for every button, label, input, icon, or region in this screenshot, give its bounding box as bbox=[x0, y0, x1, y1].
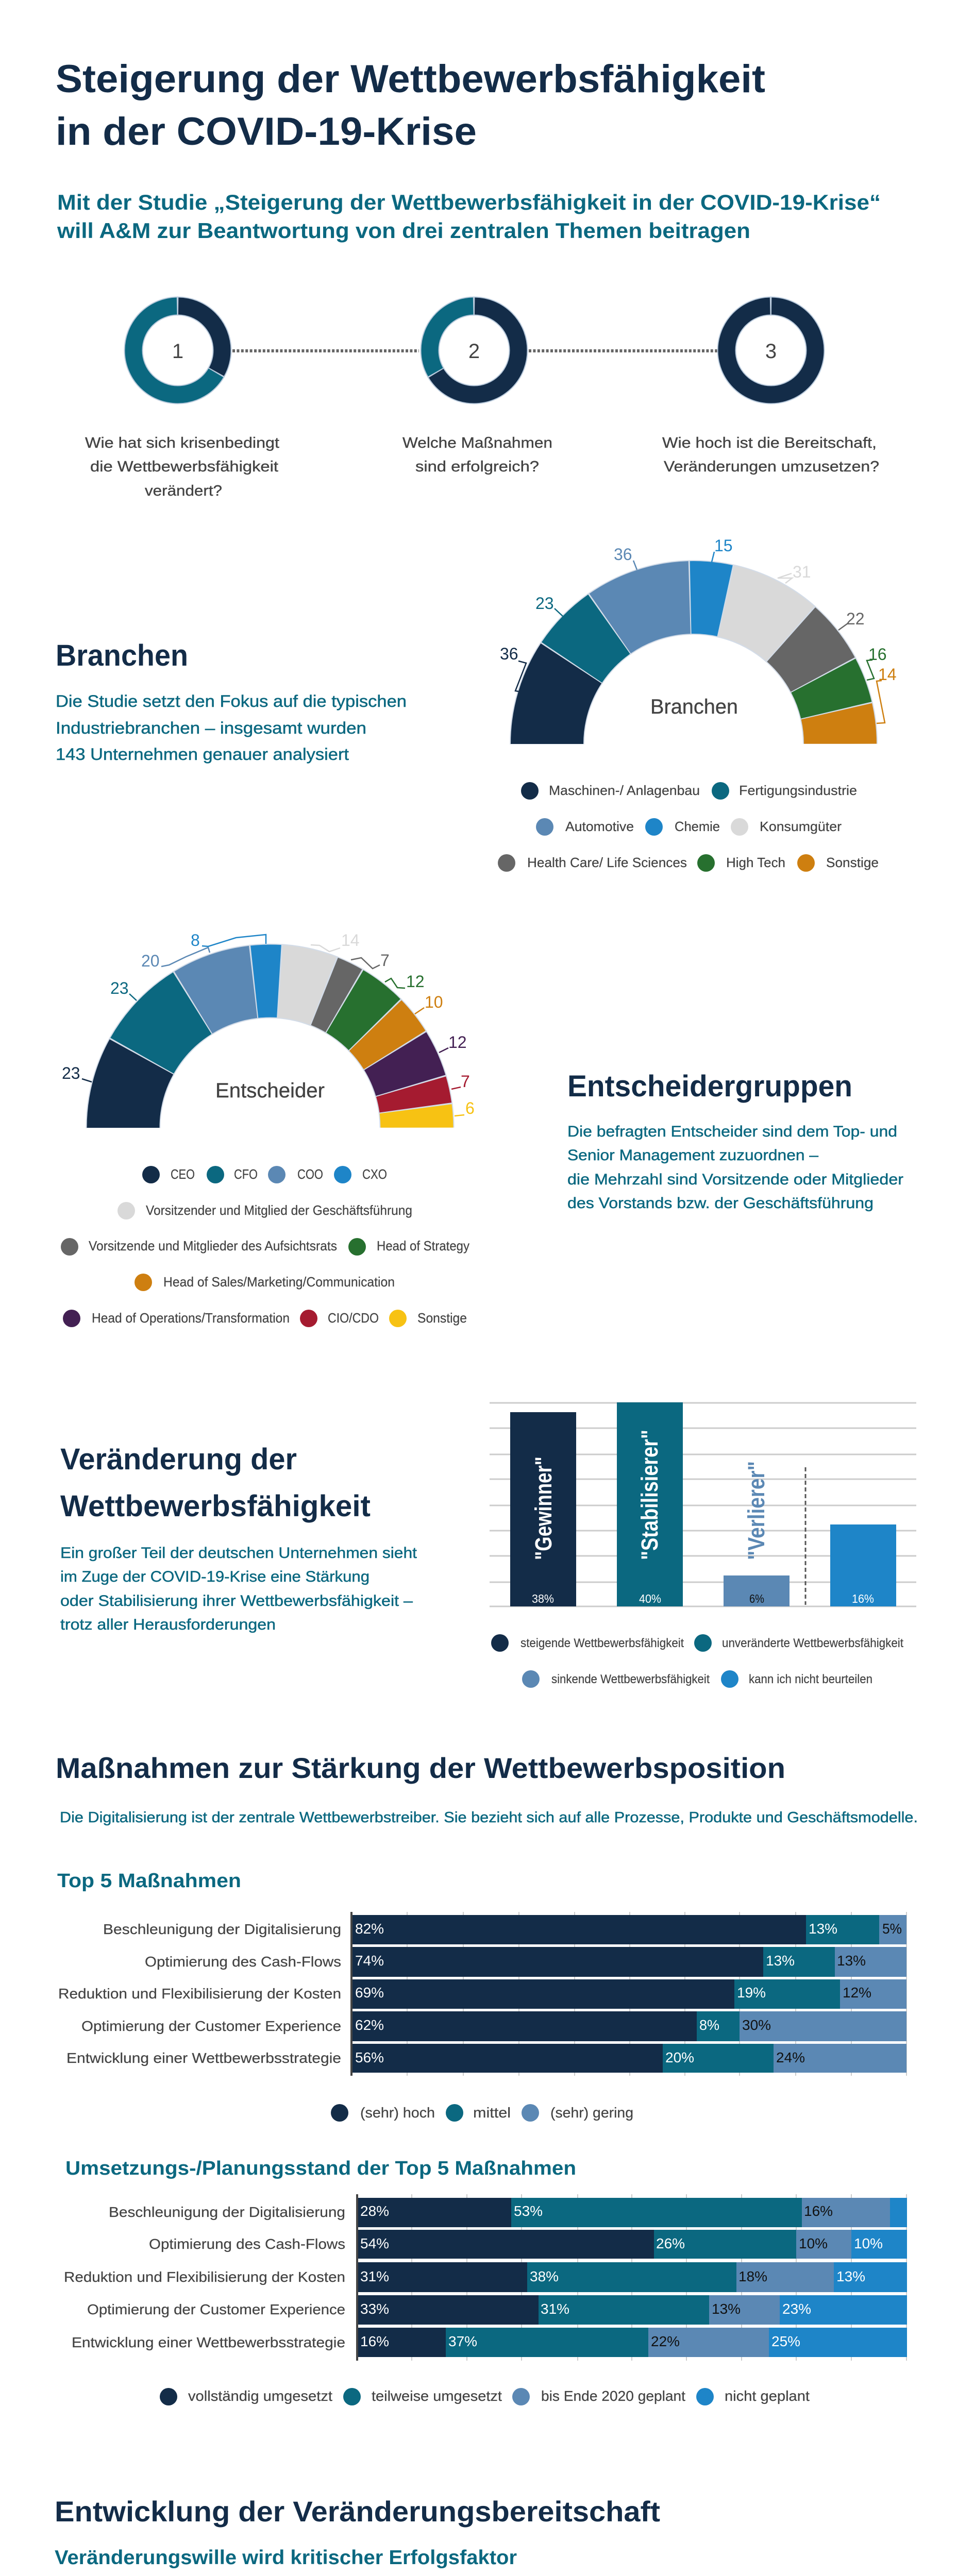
legend: Branchen: Maschinen-/ Anlagenbau bbox=[549, 783, 700, 798]
stacked bar chart: Top 5 Maßnahmen: 13% bbox=[837, 1953, 866, 1969]
legend: Branchen: High Tech bbox=[726, 855, 785, 870]
stacked bar chart: Top 5 Maßnahmen: 62% bbox=[355, 2017, 384, 2033]
legend: Entscheider: Head of Operations/Transformation bbox=[92, 1310, 290, 1326]
legend: Entscheider: Vorsitzende und Mitglieder des Aufsichtsrats bbox=[89, 1238, 337, 1253]
ring 1: 1 bbox=[172, 340, 183, 363]
stacked bar chart: Umsetzungsstand: 28% bbox=[360, 2203, 389, 2219]
text: Veränderung description: trotz aller Herausforderungen bbox=[60, 1616, 276, 1633]
half donut chart: Branchen: 14 bbox=[878, 665, 897, 684]
half donut chart: Entscheider: 8 bbox=[191, 931, 200, 950]
stacked bar chart: Umsetzungsstand: 13% bbox=[712, 2301, 741, 2317]
half donut chart: Branchen: 36 bbox=[500, 645, 518, 663]
legend: Umsetzungsstand: nicht geplant bbox=[725, 2388, 810, 2404]
title: in der COVID-19-Krise bbox=[56, 110, 477, 154]
stacked bar chart: Umsetzungsstand: 25% bbox=[771, 2333, 800, 2349]
heading: Umsetzungsstand: Umsetzungs-/Planungsstand der Top 5 Maßnahmen bbox=[65, 2158, 576, 2179]
legend: Wettbewerbsfähigkeit: unveränderte Wettbewerbsfähigkeit bbox=[722, 1636, 903, 1650]
subtitle: Mit der Studie „Steigerung der Wettbewerbsfähigkeit in der COVID-19-Krise“ bbox=[57, 190, 881, 214]
stacked bar chart: Umsetzungsstand: 10% bbox=[854, 2235, 883, 2251]
legend: Top 5 Maßnahmen: mittel bbox=[473, 2105, 511, 2121]
legend: Top 5 Maßnahmen: (sehr) hoch bbox=[360, 2105, 435, 2121]
stacked bar chart: Umsetzungsstand: 31% bbox=[541, 2301, 569, 2317]
bar chart: Wettbewerbsfähigkeit bbox=[490, 1402, 916, 1606]
legend: Wettbewerbsfähigkeit: steigende Wettbewerbsfähigkeit bbox=[520, 1636, 684, 1650]
heading: Maßnahmen: Maßnahmen zur Stärkung der Wettbewerbsposition bbox=[56, 1752, 785, 1784]
bar chart: Wettbewerbsfähigkeit: 38% bbox=[532, 1592, 554, 1605]
heading: Veränderung: Wettbewerbsfähigkeit bbox=[60, 1489, 371, 1523]
text: Branchen description: Industriebranchen – insgesamt wurden bbox=[56, 719, 366, 737]
legend: Branchen: Automotive bbox=[565, 819, 634, 834]
stacked bar chart: Top 5 Maßnahmen: 8% bbox=[699, 2017, 719, 2033]
stacked bar chart: Umsetzungsstand bbox=[64, 2194, 907, 2361]
legend: Top 5 Maßnahmen bbox=[331, 2104, 633, 2122]
question 2: sind erfolgreich? bbox=[415, 459, 539, 475]
half donut chart: Entscheider: 23 bbox=[62, 1064, 80, 1082]
legend: Entscheider: Head of Sales/Marketing/Communication bbox=[163, 1274, 395, 1290]
half donut chart: Entscheider: Entscheider bbox=[215, 1079, 325, 1102]
heading: Veränderung: Veränderung der bbox=[60, 1443, 297, 1476]
stacked bar chart: Top 5 Maßnahmen: 30% bbox=[742, 2017, 771, 2033]
legend: Entscheider: Vorsitzender und Mitglied der Geschäftsführung bbox=[146, 1202, 412, 1218]
stacked bar chart: Umsetzungsstand: 53% bbox=[514, 2203, 543, 2219]
subtitle bbox=[57, 190, 881, 243]
half donut chart: Entscheider: 23 bbox=[110, 979, 129, 997]
half donut chart: Entscheider: 6 bbox=[465, 1099, 475, 1117]
half donut chart: Entscheider: 12 bbox=[448, 1033, 467, 1052]
legend: Branchen: Konsumgüter bbox=[760, 819, 842, 834]
heading: Entscheidergruppen: Entscheidergruppen bbox=[567, 1070, 852, 1103]
text: Entscheidergruppen description: des Vorstands bzw. der Geschäftsführung bbox=[567, 1195, 874, 1212]
text: Branchen description: 143 Unternehmen genauer analysiert bbox=[56, 745, 349, 764]
text: Branchen description: Die Studie setzt den Fokus auf die typischen bbox=[56, 692, 407, 710]
legend: Branchen: Health Care/ Life Sciences bbox=[527, 855, 687, 870]
bar chart: Wettbewerbsfähigkeit: 40% bbox=[639, 1592, 661, 1605]
question 1: die Wettbewerbsfähigkeit bbox=[90, 459, 278, 475]
legend: Wettbewerbsfähigkeit: sinkende Wettbewerbsfähigkeit bbox=[551, 1672, 710, 1686]
legend: Wettbewerbsfähigkeit: kann ich nicht beurteilen bbox=[749, 1672, 872, 1686]
text: Entscheidergruppen description: die Mehrzahl sind Vorsitzende oder Mitglieder bbox=[567, 1171, 903, 1188]
stacked bar chart: Umsetzungsstand: 54% bbox=[360, 2235, 389, 2251]
half donut chart: Branchen: 31 bbox=[793, 563, 811, 581]
stacked bar chart: Umsetzungsstand: 26% bbox=[656, 2235, 685, 2251]
question 3: Wie hoch ist die Bereitschaft, bbox=[662, 435, 877, 451]
bar chart: Wettbewerbsfähigkeit: 16% bbox=[852, 1592, 874, 1605]
stacked bar chart: Umsetzungsstand: 38% bbox=[530, 2268, 559, 2284]
half donut chart: Branchen bbox=[500, 536, 897, 890]
stacked bar chart: Umsetzungsstand: 18% bbox=[738, 2268, 767, 2284]
text: Veränderung description: Ein großer Teil der deutschen Unternehmen sieht bbox=[60, 1545, 417, 1562]
legend: Umsetzungsstand: teilweise umgesetzt bbox=[372, 2388, 502, 2404]
heading: Top 5 Maßnahmen: Top 5 Maßnahmen bbox=[57, 1870, 241, 1892]
stacked bar chart: Top 5 Maßnahmen: 20% bbox=[665, 2049, 694, 2065]
text: Branchen description bbox=[56, 692, 407, 764]
stacked bar chart: Umsetzungsstand: Beschleunigung der Digitalisierung bbox=[109, 2204, 345, 2220]
stacked bar chart: Umsetzungsstand: 33% bbox=[360, 2301, 389, 2317]
title bbox=[56, 57, 765, 154]
panel: Entscheidergruppen text bbox=[567, 1070, 903, 1212]
stacked bar chart: Top 5 Maßnahmen: 12% bbox=[843, 1985, 871, 2001]
question 1: Wie hat sich krisenbedingt bbox=[85, 435, 279, 451]
panel: Branchen text bbox=[56, 639, 407, 764]
stacked bar chart: Umsetzungsstand: Optimierung des Cash-Flows bbox=[149, 2236, 345, 2252]
stacked bar chart: Top 5 Maßnahmen bbox=[58, 1912, 906, 2076]
stacked bar chart: Top 5 Maßnahmen: Beschleunigung der Digitalisierung bbox=[103, 1921, 341, 1937]
legend: Entscheider: CXO bbox=[362, 1166, 387, 1182]
legend: Umsetzungsstand bbox=[160, 2388, 810, 2405]
text: Veränderung description bbox=[60, 1545, 417, 1633]
legend: Entscheider: Sonstige bbox=[417, 1310, 467, 1326]
stacked bar chart: Umsetzungsstand: 10% bbox=[799, 2235, 828, 2251]
stacked bar chart: Top 5 Maßnahmen: 24% bbox=[776, 2049, 805, 2065]
ring 1 bbox=[133, 306, 222, 395]
stacked bar chart: Top 5 Maßnahmen: Entwicklung einer Wettbewerbsstrategie bbox=[66, 2050, 341, 2066]
legend: Umsetzungsstand: bis Ende 2020 geplant bbox=[541, 2388, 685, 2404]
stacked bar chart: Umsetzungsstand: 23% bbox=[782, 2301, 811, 2317]
bar chart: Wettbewerbsfähigkeit: "Stabilisierer" bbox=[636, 1430, 663, 1560]
half donut chart: Entscheider: 7 bbox=[380, 951, 390, 970]
half donut chart: Branchen: 15 bbox=[714, 536, 733, 555]
stacked bar chart: Umsetzungsstand: Entwicklung einer Wettbewerbsstrategie bbox=[72, 2334, 345, 2350]
panel: three questions bbox=[85, 306, 879, 499]
question 2: Welche Maßnahmen bbox=[402, 435, 552, 451]
stacked bar chart: Top 5 Maßnahmen: 69% bbox=[355, 1985, 384, 2001]
heading: Entwicklung der Veränderungsbereitschaft: Entwicklung der Veränderungsbereitschaft bbox=[55, 2495, 660, 2528]
legend: Wettbewerbsfähigkeit bbox=[491, 1634, 903, 1688]
legend: Branchen: Chemie bbox=[675, 819, 720, 834]
half donut chart: Branchen: Branchen bbox=[650, 696, 738, 718]
question 2 bbox=[402, 435, 552, 475]
stacked bar chart: Top 5 Maßnahmen: 74% bbox=[355, 1953, 384, 1969]
question 3: Veränderungen umzusetzen? bbox=[664, 459, 879, 475]
stacked bar chart: Top 5 Maßnahmen: 5% bbox=[882, 1921, 902, 1937]
text: Veränderung description: oder Stabilisierung ihrer Wettbewerbsfähigkeit – bbox=[60, 1592, 413, 1609]
bar chart: Wettbewerbsfähigkeit: "Gewinner" bbox=[530, 1456, 557, 1560]
legend: Branchen: Sonstige bbox=[826, 855, 879, 870]
bar chart: Wettbewerbsfähigkeit: 6% bbox=[749, 1592, 764, 1605]
text: Veränderung description: im Zuge der COVID-19-Krise eine Stärkung bbox=[60, 1568, 370, 1585]
half donut chart: Entscheider bbox=[62, 931, 475, 1275]
heading: Branchen: Branchen bbox=[56, 639, 188, 672]
stacked bar chart: Top 5 Maßnahmen: 13% bbox=[766, 1953, 795, 1969]
half donut chart: Entscheider: 20 bbox=[141, 952, 160, 970]
panel: Veränderung der Wettbewerbsfähigkeit text bbox=[60, 1443, 417, 1633]
legend: Umsetzungsstand: vollständig umgesetzt bbox=[188, 2388, 332, 2404]
title: Steigerung der Wettbewerbsfähigkeit bbox=[56, 57, 765, 101]
stacked bar chart: Top 5 Maßnahmen: 82% bbox=[355, 1921, 384, 1937]
ring 3 bbox=[727, 306, 815, 395]
stacked bar chart: Top 5 Maßnahmen: Optimierung des Cash-Flows bbox=[145, 1954, 341, 1970]
subtitle: will A&M zur Beantwortung von drei zentralen Themen beitragen bbox=[57, 218, 750, 243]
text: Digitalisierung: Die Digitalisierung ist der zentrale Wettbewerbstreiber. Sie bezieht sich auf alle Prozesse, Produkte und Geschäftsmodelle. bbox=[60, 1809, 918, 1826]
legend: Entscheider: COO bbox=[297, 1166, 323, 1182]
text: Entscheidergruppen description: Senior Management zuzuordnen – bbox=[567, 1147, 818, 1164]
half donut chart: Entscheider: 14 bbox=[341, 931, 360, 950]
legend: Entscheider: CEO bbox=[171, 1166, 195, 1182]
text: Entscheidergruppen description bbox=[567, 1123, 903, 1212]
legend: Entscheider: CIO/CDO bbox=[328, 1310, 379, 1326]
ring 2 bbox=[430, 306, 518, 395]
half donut chart: Branchen: 16 bbox=[868, 645, 887, 664]
stacked bar chart: Top 5 Maßnahmen: 56% bbox=[355, 2049, 384, 2065]
connector 2 bbox=[529, 349, 717, 352]
bar chart: Wettbewerbsfähigkeit: "Verlierer" bbox=[743, 1461, 769, 1560]
stacked bar chart: Umsetzungsstand: 31% bbox=[360, 2268, 389, 2284]
connector 1 bbox=[232, 349, 419, 352]
ring 2: 2 bbox=[468, 340, 480, 363]
legend: Top 5 Maßnahmen: (sehr) gering bbox=[550, 2105, 633, 2121]
half donut chart: Entscheider: 10 bbox=[425, 993, 443, 1011]
subheading: Veränderungswille: Veränderungswille wird kritischer Erfolgsfaktor bbox=[55, 2547, 517, 2569]
question 1 bbox=[85, 435, 279, 499]
half donut chart: Branchen: 22 bbox=[846, 609, 865, 628]
stacked bar chart: Umsetzungsstand: Reduktion und Flexibilisierung der Kosten bbox=[64, 2269, 345, 2285]
stacked bar chart: Top 5 Maßnahmen: Reduktion und Flexibilisierung der Kosten bbox=[58, 1986, 341, 2002]
stacked bar chart: Umsetzungsstand: 16% bbox=[360, 2333, 389, 2349]
ring 3: 3 bbox=[765, 340, 777, 363]
legend: Branchen bbox=[498, 782, 879, 872]
half donut chart: Branchen: 23 bbox=[535, 594, 554, 613]
stacked bar chart: Umsetzungsstand: 22% bbox=[651, 2333, 680, 2349]
legend: Branchen: Fertigungsindustrie bbox=[739, 783, 857, 798]
stacked bar chart: Top 5 Maßnahmen: 13% bbox=[809, 1921, 837, 1937]
legend: Entscheider: Head of Strategy bbox=[377, 1238, 469, 1253]
heading: Veränderung bbox=[60, 1443, 371, 1523]
legend: Entscheider: CFO bbox=[234, 1166, 258, 1182]
half donut chart: Entscheider: 7 bbox=[461, 1072, 470, 1091]
legend: Entscheider bbox=[61, 1166, 469, 1327]
stacked bar chart: Umsetzungsstand: 37% bbox=[448, 2333, 477, 2349]
stacked bar chart: Umsetzungsstand: 13% bbox=[836, 2268, 865, 2284]
stacked bar chart: Umsetzungsstand: 16% bbox=[804, 2203, 833, 2219]
stacked bar chart: Umsetzungsstand: Optimierung der Customer Experience bbox=[87, 2301, 345, 2317]
question 3 bbox=[662, 435, 879, 475]
half donut chart: Branchen: 36 bbox=[614, 545, 632, 564]
question 1: verändert? bbox=[145, 483, 222, 499]
stacked bar chart: Top 5 Maßnahmen: 19% bbox=[737, 1985, 766, 2001]
stacked bar chart: Top 5 Maßnahmen: Optimierung der Customer Experience bbox=[81, 2018, 341, 2034]
text: Entscheidergruppen description: Die befragten Entscheider sind dem Top- und bbox=[567, 1123, 897, 1140]
half donut chart: Entscheider: 12 bbox=[406, 972, 425, 991]
